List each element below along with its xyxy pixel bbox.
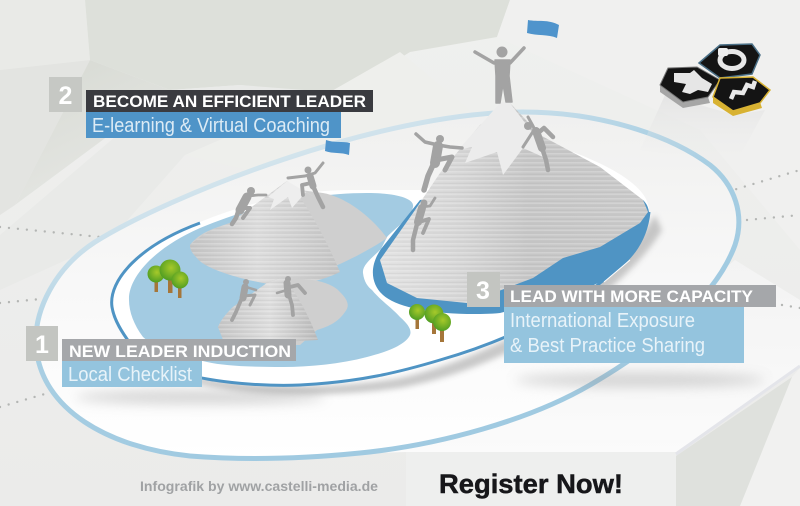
mountain 3 xyxy=(380,103,648,303)
figure right on middle mountain xyxy=(288,163,323,207)
subheading 3: & Best Practice Sharing xyxy=(510,335,705,357)
figure right on small mountain xyxy=(277,276,305,315)
figure on summit xyxy=(475,46,524,103)
mountain 1 xyxy=(218,277,348,345)
hexagon: power icon xyxy=(699,44,760,78)
water xyxy=(129,193,413,367)
climbers xyxy=(232,46,553,320)
number badge 1: 1 xyxy=(35,331,49,359)
hexagon shadow streaks xyxy=(640,95,765,165)
subheading 1: Local Checklist xyxy=(68,364,192,386)
lower white platform xyxy=(340,260,800,454)
flag big mountain xyxy=(527,20,559,38)
trees right group xyxy=(409,304,451,342)
dotted connector lines xyxy=(0,170,800,407)
number badge 2: 2 xyxy=(59,82,72,110)
subheading 3: International Exposure xyxy=(510,310,695,332)
platform highlight line xyxy=(604,260,630,282)
callout 3 xyxy=(467,272,776,363)
flag middle mountain xyxy=(325,140,350,155)
outer plate xyxy=(36,112,739,458)
number badge 3: 3 xyxy=(476,277,490,305)
number badge 1 xyxy=(26,326,58,361)
figure right on big mountain xyxy=(523,117,553,170)
register now call to action: Register Now! xyxy=(439,469,623,499)
label shadows on plate xyxy=(75,373,765,404)
hexagon icon cluster xyxy=(660,44,770,116)
subheading 3 xyxy=(504,307,744,363)
figure left on big mountain xyxy=(416,134,462,190)
heading 1: NEW LEADER INDUCTION xyxy=(69,343,291,361)
figure left on small mountain xyxy=(232,279,256,320)
hexagon: wrench icon xyxy=(660,67,720,108)
inner disc shadow xyxy=(130,215,662,394)
footer panel xyxy=(406,366,800,506)
heading 2: BECOME AN EFFICIENT LEADER xyxy=(93,93,366,111)
figure left on middle mountain xyxy=(232,187,266,224)
inner disc blue rim xyxy=(112,212,649,385)
subheading 2: E-learning & Virtual Coaching xyxy=(92,115,330,137)
mountain 2 xyxy=(190,181,387,285)
credit text: Infografik by www.castelli-media.de xyxy=(140,478,378,494)
figure low on big mountain xyxy=(413,198,435,250)
inner disc xyxy=(112,152,649,385)
callout 2 xyxy=(49,77,373,138)
number badge 3 xyxy=(467,272,500,307)
number badge 2 xyxy=(49,77,82,112)
hexagon: zigzag icon xyxy=(713,77,770,116)
heading 3: LEAD WITH MORE CAPACITY xyxy=(510,288,753,306)
callout 1 xyxy=(26,326,296,387)
trees left group xyxy=(148,260,188,298)
blue platform of mountain 3 xyxy=(373,180,649,314)
